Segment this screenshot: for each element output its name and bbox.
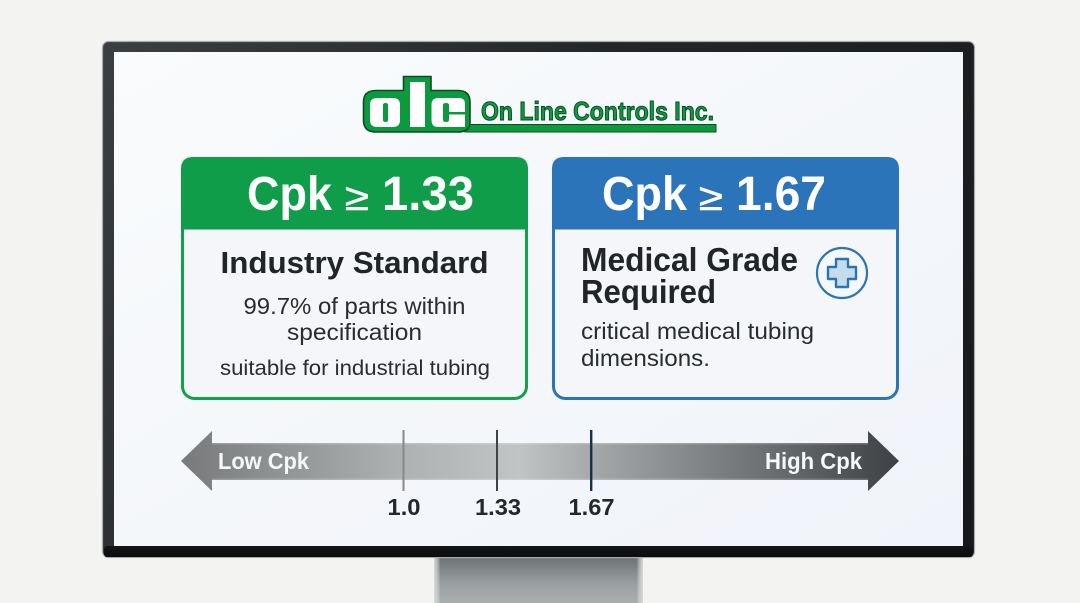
scale arrow: Low to High Cpk xyxy=(181,430,899,520)
logo: On Line Controls Inc. xyxy=(364,76,716,132)
panel header: Cpk 1.67: ≥ xyxy=(699,177,723,219)
text: suitable for industrial tubing: suitable for industrial tubing xyxy=(220,357,490,380)
logo name: On Line Controls Inc. xyxy=(481,96,714,126)
panel header: Cpk 1.33: ≥ xyxy=(345,177,369,219)
panel header: Cpk 1.67 xyxy=(552,157,899,230)
tick: 1.33 xyxy=(475,430,521,520)
monitor frame xyxy=(102,42,974,558)
text: within specification: 99.7% of parts within xyxy=(244,293,466,319)
panel header: Cpk 1.33: 1.33 xyxy=(382,168,474,221)
label: High Cpk: High Cpk xyxy=(765,448,862,474)
heading: Medical Grade Required: Required xyxy=(581,273,716,310)
text: within specification: specification xyxy=(287,319,422,345)
icon: medical cross xyxy=(817,248,867,298)
tick: 1.0: 1.0 xyxy=(388,494,420,520)
panel: industry standard xyxy=(181,157,528,398)
text: critical medical tubing dimensions: dimensions. xyxy=(581,345,710,371)
panel header: Cpk 1.33 xyxy=(181,157,528,230)
panel header: Cpk 1.33: Cpk xyxy=(247,168,332,221)
heading: Medical Grade Required: Medical Grade xyxy=(581,241,798,278)
tick: 1.67: 1.67 xyxy=(568,494,614,520)
monitor stand xyxy=(434,557,643,603)
tick: 1.33: 1.33 xyxy=(475,494,521,520)
heading: Industry Standard: Industry Standard xyxy=(220,245,488,280)
text: critical medical tubing dimensions xyxy=(581,318,814,371)
monitor screen xyxy=(114,52,963,546)
text: within specification xyxy=(244,293,466,345)
text: critical medical tubing dimensions: critical medical tubing xyxy=(581,318,814,344)
logo underline xyxy=(465,124,716,132)
panel: medical grade xyxy=(552,157,899,398)
panel header: Cpk 1.67: 1.67 xyxy=(736,168,826,221)
double-headed arrow xyxy=(181,431,899,491)
heading: Medical Grade Required xyxy=(581,241,798,310)
label: Low Cpk: Low Cpk xyxy=(218,448,309,474)
tick: 1.0 xyxy=(388,430,420,520)
logo mark: olc xyxy=(364,76,470,132)
tick: 1.67 xyxy=(568,430,614,520)
panel header: Cpk 1.67: Cpk xyxy=(602,168,687,221)
